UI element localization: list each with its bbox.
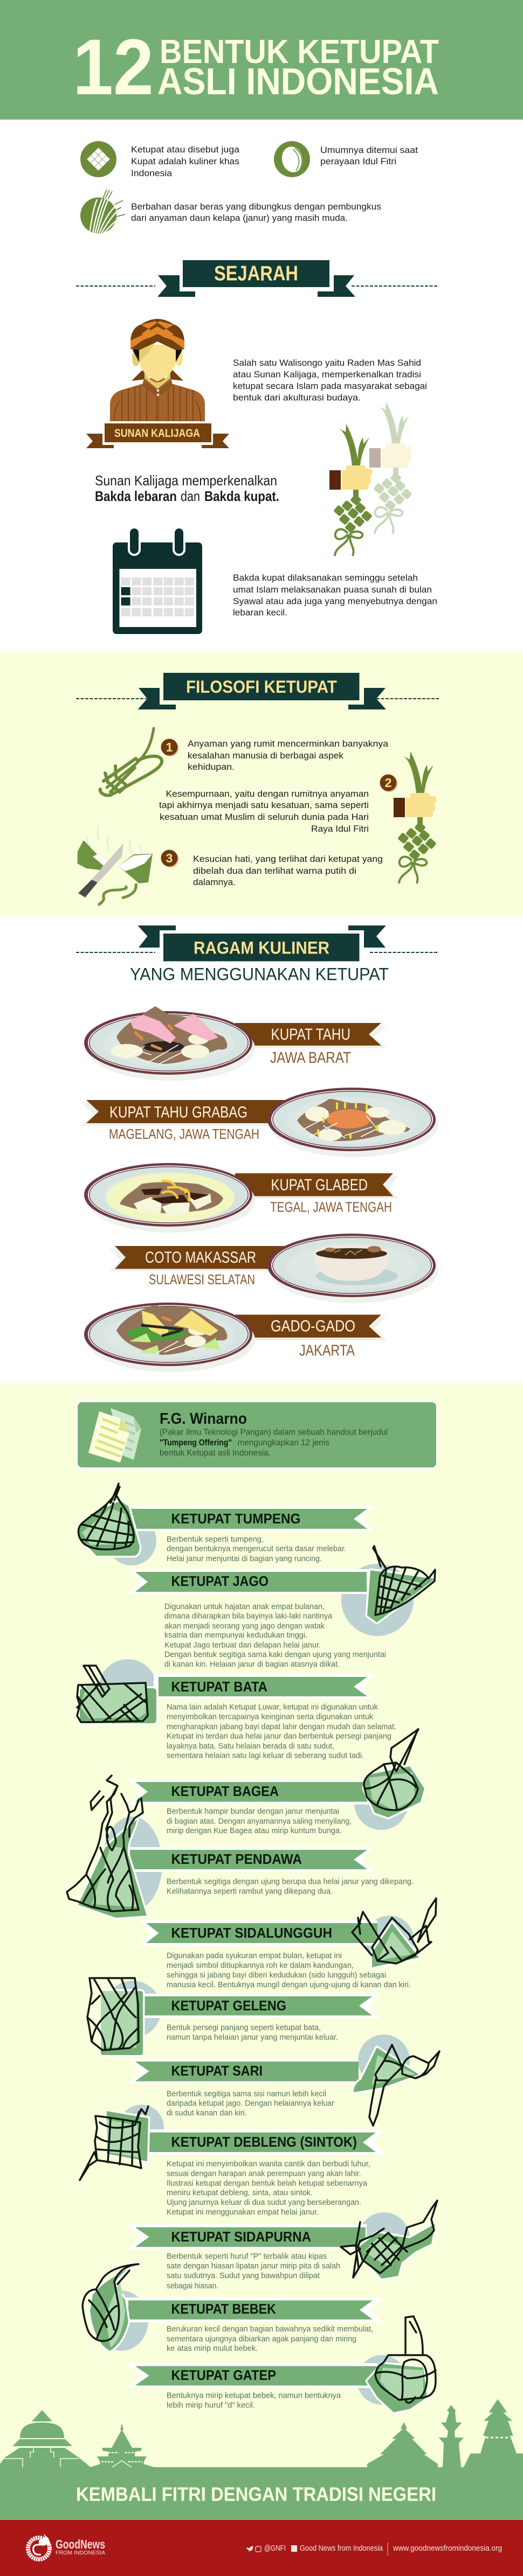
description: "Tumpeng Offering" bbox=[160, 1438, 232, 1447]
description: di bagian atas. Dengan anyamannya saling menyilang, bbox=[167, 1818, 352, 1826]
description bbox=[160, 1428, 388, 1458]
dish: gado-gado bbox=[84, 1303, 387, 1372]
description: ke atas mirip mulut bebek. bbox=[167, 2344, 258, 2353]
illustration: woven leaf knot bbox=[100, 728, 162, 795]
ketupat bagea bbox=[128, 1729, 424, 1835]
badge: number 2: 2 bbox=[385, 776, 391, 790]
icon: halved rice cake bbox=[274, 141, 310, 177]
description bbox=[167, 1807, 352, 1835]
text block: Indonesia bbox=[131, 168, 173, 178]
description: sementara helaian satu lagi keluar di seberang sudut tadi. bbox=[167, 1752, 364, 1760]
title: KETUPAT PENDAWA bbox=[171, 1851, 302, 1867]
description bbox=[167, 1535, 346, 1563]
description bbox=[167, 1952, 411, 1989]
ketupat bata bbox=[77, 1659, 396, 1760]
description: lebih mirip huruf "d" kecil. bbox=[167, 2401, 255, 2410]
ketupat debleng bbox=[80, 2105, 386, 2217]
text block: perayaan Idul Fitri bbox=[320, 156, 396, 166]
ketupat jago bbox=[128, 1546, 435, 1669]
text block: Berbahan dasar beras yang dibungkus dengan pembungkus bbox=[131, 201, 381, 212]
description: sate dengan hiasan lipatan janur mirip pita di salah bbox=[167, 2262, 340, 2271]
description bbox=[167, 2392, 341, 2410]
title: KETUPAT BEBEK bbox=[171, 2301, 276, 2317]
description bbox=[167, 2024, 338, 2042]
text: bakda kupat: lebaran kecil. bbox=[233, 608, 287, 617]
text: filosofi 2: tapi akhirnya menjadi satu kesatuan, sama seperti bbox=[159, 800, 369, 810]
description: bentuk Ketupat asli Indonesia. bbox=[160, 1449, 271, 1458]
description: Berbentuk seperti huruf "P" terbalik atau kipas bbox=[167, 2252, 327, 2261]
ketupat gatep bbox=[128, 2316, 436, 2412]
badge: number 1: 1 bbox=[166, 740, 173, 754]
logo: GoodNews from Indonesia: FROM INDONESIA bbox=[56, 2550, 105, 2556]
region: JAWA BARAT bbox=[270, 1049, 351, 1067]
description: Digunakan untuk hajatan anak empat bulanan, bbox=[164, 1603, 325, 1611]
illustration: Sunan Kalijaga portrait bbox=[86, 319, 229, 448]
text: filosofi 1: Anyaman yang rumit mencerminkan banyaknya bbox=[188, 739, 389, 749]
description: Berbentuk hampir bundar dengan janur menjuntai bbox=[167, 1807, 339, 1816]
title: KETUPAT TUMPENG bbox=[171, 1510, 301, 1527]
text: filosofi 1: kehidupan. bbox=[188, 762, 235, 772]
dish: kupat tahu grabag bbox=[81, 1088, 438, 1157]
description bbox=[167, 2252, 340, 2290]
icon: young coconut leaf bbox=[80, 190, 125, 234]
description: di sudut kanan dan kiri. bbox=[167, 2109, 247, 2118]
text block: dari anyaman daun kelapa (janur) yang masih muda. bbox=[131, 213, 348, 223]
heading: filosofi banner: FILOSOFI KETUPAT bbox=[186, 677, 337, 697]
title: KETUPAT GELENG bbox=[171, 1997, 286, 2014]
illustration: Sunan Kalijaga portrait: SUNAN KALIJAGA bbox=[114, 427, 200, 440]
icon: ketupat diamond bbox=[80, 141, 116, 177]
text: filosofi 1: kesalahan manusia di berbagai aspek bbox=[188, 750, 343, 761]
illustration: halved ketupat and knife bbox=[78, 825, 153, 905]
text: bakda lebaran statement bbox=[95, 472, 279, 504]
title: KETUPAT GATEP bbox=[171, 2367, 276, 2383]
text: filosofi 3: dibelah dua dan terlihat warna putih di bbox=[193, 866, 356, 876]
description: sesuai dengan harapan anak perempuan yang akan lahir. bbox=[167, 2170, 361, 2178]
description: Berbentuk segitiga dengan ujung berupa dua helai janur yang dikepang. bbox=[167, 1878, 414, 1886]
label: KUPAT TAHU GRABAG bbox=[109, 1103, 247, 1122]
icon: calendar bbox=[113, 527, 202, 634]
text: walisongo: bentuk dari akulturasi budaya. bbox=[233, 392, 361, 403]
text block bbox=[131, 144, 240, 178]
text block: Umumnya ditemui saat bbox=[320, 145, 418, 155]
ketupat sidapurna bbox=[128, 2201, 437, 2290]
intro: ketupat definition bbox=[80, 141, 240, 178]
description: dimana diharapkan bila bayinya laki-laki nantinya bbox=[164, 1612, 333, 1621]
text: bakda lebaran statement: Bakda kupat. bbox=[204, 488, 279, 504]
social and website bbox=[246, 2543, 502, 2556]
description: ksatria dan mempunyai kedudukan tinggi. bbox=[164, 1631, 307, 1640]
description: Nama lain adalah Ketupat Luwar, ketupat ini digunakan untuk bbox=[167, 1703, 379, 1712]
page name: Good News from Indonesia bbox=[300, 2544, 383, 2553]
dish: coto makassar bbox=[109, 1234, 438, 1303]
description: Bentuknya mirip ketupat bebek, namun bentuknya bbox=[167, 2392, 341, 2400]
text: filosofi 3: dalamnya. bbox=[193, 877, 236, 887]
description bbox=[167, 2160, 370, 2217]
ketupat tumpeng bbox=[78, 1484, 374, 1565]
region: MAGELANG, JAWA TENGAH bbox=[109, 1126, 259, 1142]
description: Berbentuk seperti tumpeng, bbox=[167, 1535, 264, 1544]
description bbox=[167, 1878, 414, 1896]
text: bakda lebaran statement: Sunan Kalijaga memperkenalkan bbox=[95, 472, 277, 489]
description: akan menjadi seorang yang jago dengan watak bbox=[164, 1622, 325, 1631]
description: Ujung janurnya keluar di dua sudut yang berseberangan. bbox=[167, 2198, 361, 2207]
region: SULAWESI SELATAN bbox=[149, 1271, 255, 1287]
badge: number 1 bbox=[161, 739, 179, 756]
icon: documents bbox=[88, 1408, 141, 1463]
description: menjadi simbol ditiupkannya roh ke dalam kandungan, bbox=[167, 1961, 354, 1970]
text: filosofi 2: Raya Idul Fitri bbox=[311, 824, 369, 834]
ketupat sari bbox=[128, 2035, 439, 2126]
illustration: green ketupat in hand bbox=[329, 424, 373, 556]
description: namun tanpa helaian janur yang menjuntai keluar. bbox=[167, 2033, 338, 2042]
description: (Pakar Ilmu Teknologi Pangan) dalam sebuah handout berjudul bbox=[160, 1428, 388, 1437]
text: bakda lebaran statement: dan bbox=[181, 488, 200, 504]
dish: kupat tahu bbox=[84, 1006, 387, 1081]
logo: GoodNews from Indonesia bbox=[28, 2533, 105, 2559]
ketupat sidalungguh bbox=[139, 1898, 436, 1989]
description bbox=[167, 2090, 334, 2118]
intro: ingredients bbox=[80, 190, 381, 234]
callout: F.G. Winarno bbox=[76, 1400, 437, 1470]
description bbox=[167, 1703, 396, 1760]
icon: twitter bbox=[246, 2546, 253, 2551]
text: filosofi 2: Kesempurnaan, yaitu dengan rumitnya anyaman bbox=[166, 789, 369, 799]
ketupat bebek bbox=[82, 2264, 382, 2353]
description: mengharapkan jabang bayi dapat lahir dengan mudah dan selamat. bbox=[167, 1723, 396, 1731]
description: layaknya bata. Satu helaian berada di satu sudut, bbox=[167, 1742, 334, 1751]
description: sebagai hiasan. bbox=[167, 2282, 218, 2290]
label: KUPAT GLABED bbox=[271, 1176, 368, 1194]
label: COTO MAKASSAR bbox=[145, 1249, 256, 1266]
description: Ketupat Jago terbuat dari delapan helai janur. bbox=[164, 1641, 321, 1650]
header band bbox=[0, 0, 523, 120]
title: KETUPAT BATA bbox=[171, 1679, 267, 1695]
heading: filosofi banner bbox=[76, 673, 439, 709]
text: filosofi 2 bbox=[159, 789, 369, 834]
description: Dengan bentuk segitiga sama kaki dengan ujung yang menjuntai bbox=[164, 1651, 386, 1659]
text block: Ketupat atau disebut juga bbox=[131, 144, 240, 155]
description bbox=[164, 1603, 386, 1669]
footer band bbox=[0, 2467, 523, 2520]
panel: 12 ketupat background bbox=[0, 1383, 523, 2467]
illustration: pale ketupat in hand bbox=[369, 402, 412, 534]
text: bakda lebaran statement: Bakda lebaran bbox=[95, 488, 177, 504]
description: satu sudutnya. Sudut yang bawahpun dilipat bbox=[167, 2272, 320, 2280]
title bbox=[73, 23, 439, 112]
heading: sejarah banner: SEJARAH bbox=[214, 262, 298, 286]
illustration: temple skyline bbox=[0, 2399, 523, 2467]
subheading: YANG MENGGUNAKAN KETUPAT bbox=[130, 964, 389, 984]
text: walisongo bbox=[233, 358, 427, 403]
heading: ragam kuliner banner bbox=[76, 925, 439, 961]
badge: number 2 bbox=[380, 775, 398, 792]
ketupat pendawa bbox=[67, 1776, 414, 1918]
footer: credits bar bbox=[0, 2520, 523, 2576]
region: TEGAL, JAWA TENGAH bbox=[270, 1199, 392, 1215]
description: sehingga si jabang bayi diberi kedudukan (sido lungguh) sebagai bbox=[167, 1971, 386, 1980]
text: filosofi 1 bbox=[188, 739, 389, 772]
intro: idul fitri bbox=[274, 141, 418, 177]
handle: @GNFI bbox=[264, 2544, 286, 2553]
badge: number 3: 3 bbox=[166, 851, 173, 865]
text block bbox=[320, 145, 418, 166]
description: Bentuk persegi panjang seperti ketupat bata, bbox=[167, 2024, 321, 2032]
title: KETUPAT DEBLENG (SINTOK) bbox=[171, 2134, 357, 2150]
description: Ketupat ini menggunakan empat helai janur. bbox=[167, 2208, 319, 2217]
description: Kelihatannya seperti rambut yang dikepang dua. bbox=[167, 1888, 333, 1896]
description: Ketupat ini menyimbolkan wanita cantik dan berbudi luhur, bbox=[167, 2160, 370, 2168]
heading: sejarah banner bbox=[76, 260, 439, 297]
text block: Kupat adalah kuliner khas bbox=[131, 156, 239, 166]
description: dengan bentuknya mengerucut serta dasar melebar. bbox=[167, 1545, 346, 1554]
heading: ragam kuliner banner: RAGAM KULINER bbox=[194, 938, 329, 958]
description: di kanan kiri. Helaian janur di bagian atasnya diikat. bbox=[164, 1660, 340, 1669]
title: KETUPAT SARI bbox=[171, 2063, 263, 2079]
title: KETUPAT BAGEA bbox=[171, 1783, 279, 1799]
description: Berukuran kecil dengan bagian bawahnya sedikit membulat, bbox=[167, 2325, 373, 2334]
description: Digunakan pada syukuran empat bulan, ketupat ini bbox=[167, 1952, 342, 1960]
ketupat geleng bbox=[87, 1978, 380, 2055]
description: Berbentuk segitiga sama sisi namun lebih kecil bbox=[167, 2090, 326, 2098]
dish: kupat glabed bbox=[84, 1163, 398, 1233]
description: sementara ujungnya dibiarkan agak panjang dan miring bbox=[167, 2335, 356, 2343]
description: Ilustrasi ketupat dengan bentuk belah ketupat sebenarnya bbox=[167, 2180, 368, 2188]
title: BENTUK KETUPAT bbox=[160, 33, 439, 71]
description: daripada ketupat jago. Dengan helaiannya keluar bbox=[167, 2099, 334, 2108]
text: walisongo: Salah satu Walisongo yaitu Raden Mas Sahid bbox=[233, 358, 421, 368]
description: Ketupat ini terdari dua helai janur dan berbentuk persegi panjang bbox=[167, 1732, 391, 1741]
panel: filosofi background bbox=[0, 653, 523, 916]
icon: facebook bbox=[291, 2545, 297, 2552]
text: filosofi 3: Kesucian hati, yang terlihat dari ketupat yang bbox=[193, 854, 383, 864]
text: filosofi 3 bbox=[193, 854, 383, 887]
region: JAKARTA bbox=[299, 1342, 355, 1360]
heading: F.G. Winarno bbox=[160, 1410, 247, 1428]
text: bakda kupat: Syawal atau ada juga yang menyebutnya dengan bbox=[233, 596, 437, 607]
text: bakda kupat: Bakda kupat dilaksanakan seminggu setelah bbox=[233, 573, 418, 583]
description: Helai janur menjuntai di bagian yang runcing. bbox=[167, 1555, 322, 1563]
text: bakda kupat bbox=[233, 573, 437, 617]
description: menyimbolkan tercapainya keinginan serta digunakan untuk bbox=[167, 1712, 374, 1721]
badge: number 3 bbox=[161, 850, 179, 867]
description: mirip dengan Kue Bagea atau mirip kuntum bunga. bbox=[167, 1827, 342, 1835]
title: KETUPAT JAGO bbox=[171, 1573, 269, 1589]
logo: GoodNews from Indonesia: GoodNews bbox=[56, 2537, 105, 2551]
text: bakda kupat: umat Islam melaksanakan puasa sunah di bulan bbox=[233, 584, 432, 595]
text: walisongo: ketupat secara Islam pada masyarakat sebagai bbox=[233, 381, 427, 391]
description bbox=[167, 2325, 373, 2353]
closing slogan: KEMBALI FITRI DENGAN TRADISI NEGERI bbox=[76, 2483, 436, 2505]
title: KETUPAT SIDALUNGGUH bbox=[171, 1925, 332, 1941]
description: mengungkapkan 12 jenis bbox=[237, 1438, 329, 1447]
label: GADO-GADO bbox=[271, 1318, 355, 1335]
illustration: ketupat in hand bbox=[394, 751, 437, 883]
website: www.goodnewsfromindonesia.org bbox=[393, 2544, 502, 2553]
title: 12 bbox=[73, 23, 154, 112]
description: meniru ketupat debleng, sinta, atau sintok. bbox=[167, 2189, 313, 2197]
text: walisongo: atau Sunan Kalijaga, memperkenalkan tradisi bbox=[233, 370, 421, 379]
label: KUPAT TAHU bbox=[271, 1026, 350, 1043]
description: manusia kecil. Bentuknya mungil dengan ujung-ujung di kanan dan kiri. bbox=[167, 1981, 411, 1989]
title: ASLI INDONESIA bbox=[157, 60, 439, 102]
icon: instagram bbox=[256, 2546, 261, 2552]
text block bbox=[131, 201, 381, 223]
text: filosofi 2: kesatuan umat Muslim di seluruh dunia pada Hari bbox=[160, 812, 369, 822]
title: KETUPAT SIDAPURNA bbox=[171, 2229, 311, 2245]
